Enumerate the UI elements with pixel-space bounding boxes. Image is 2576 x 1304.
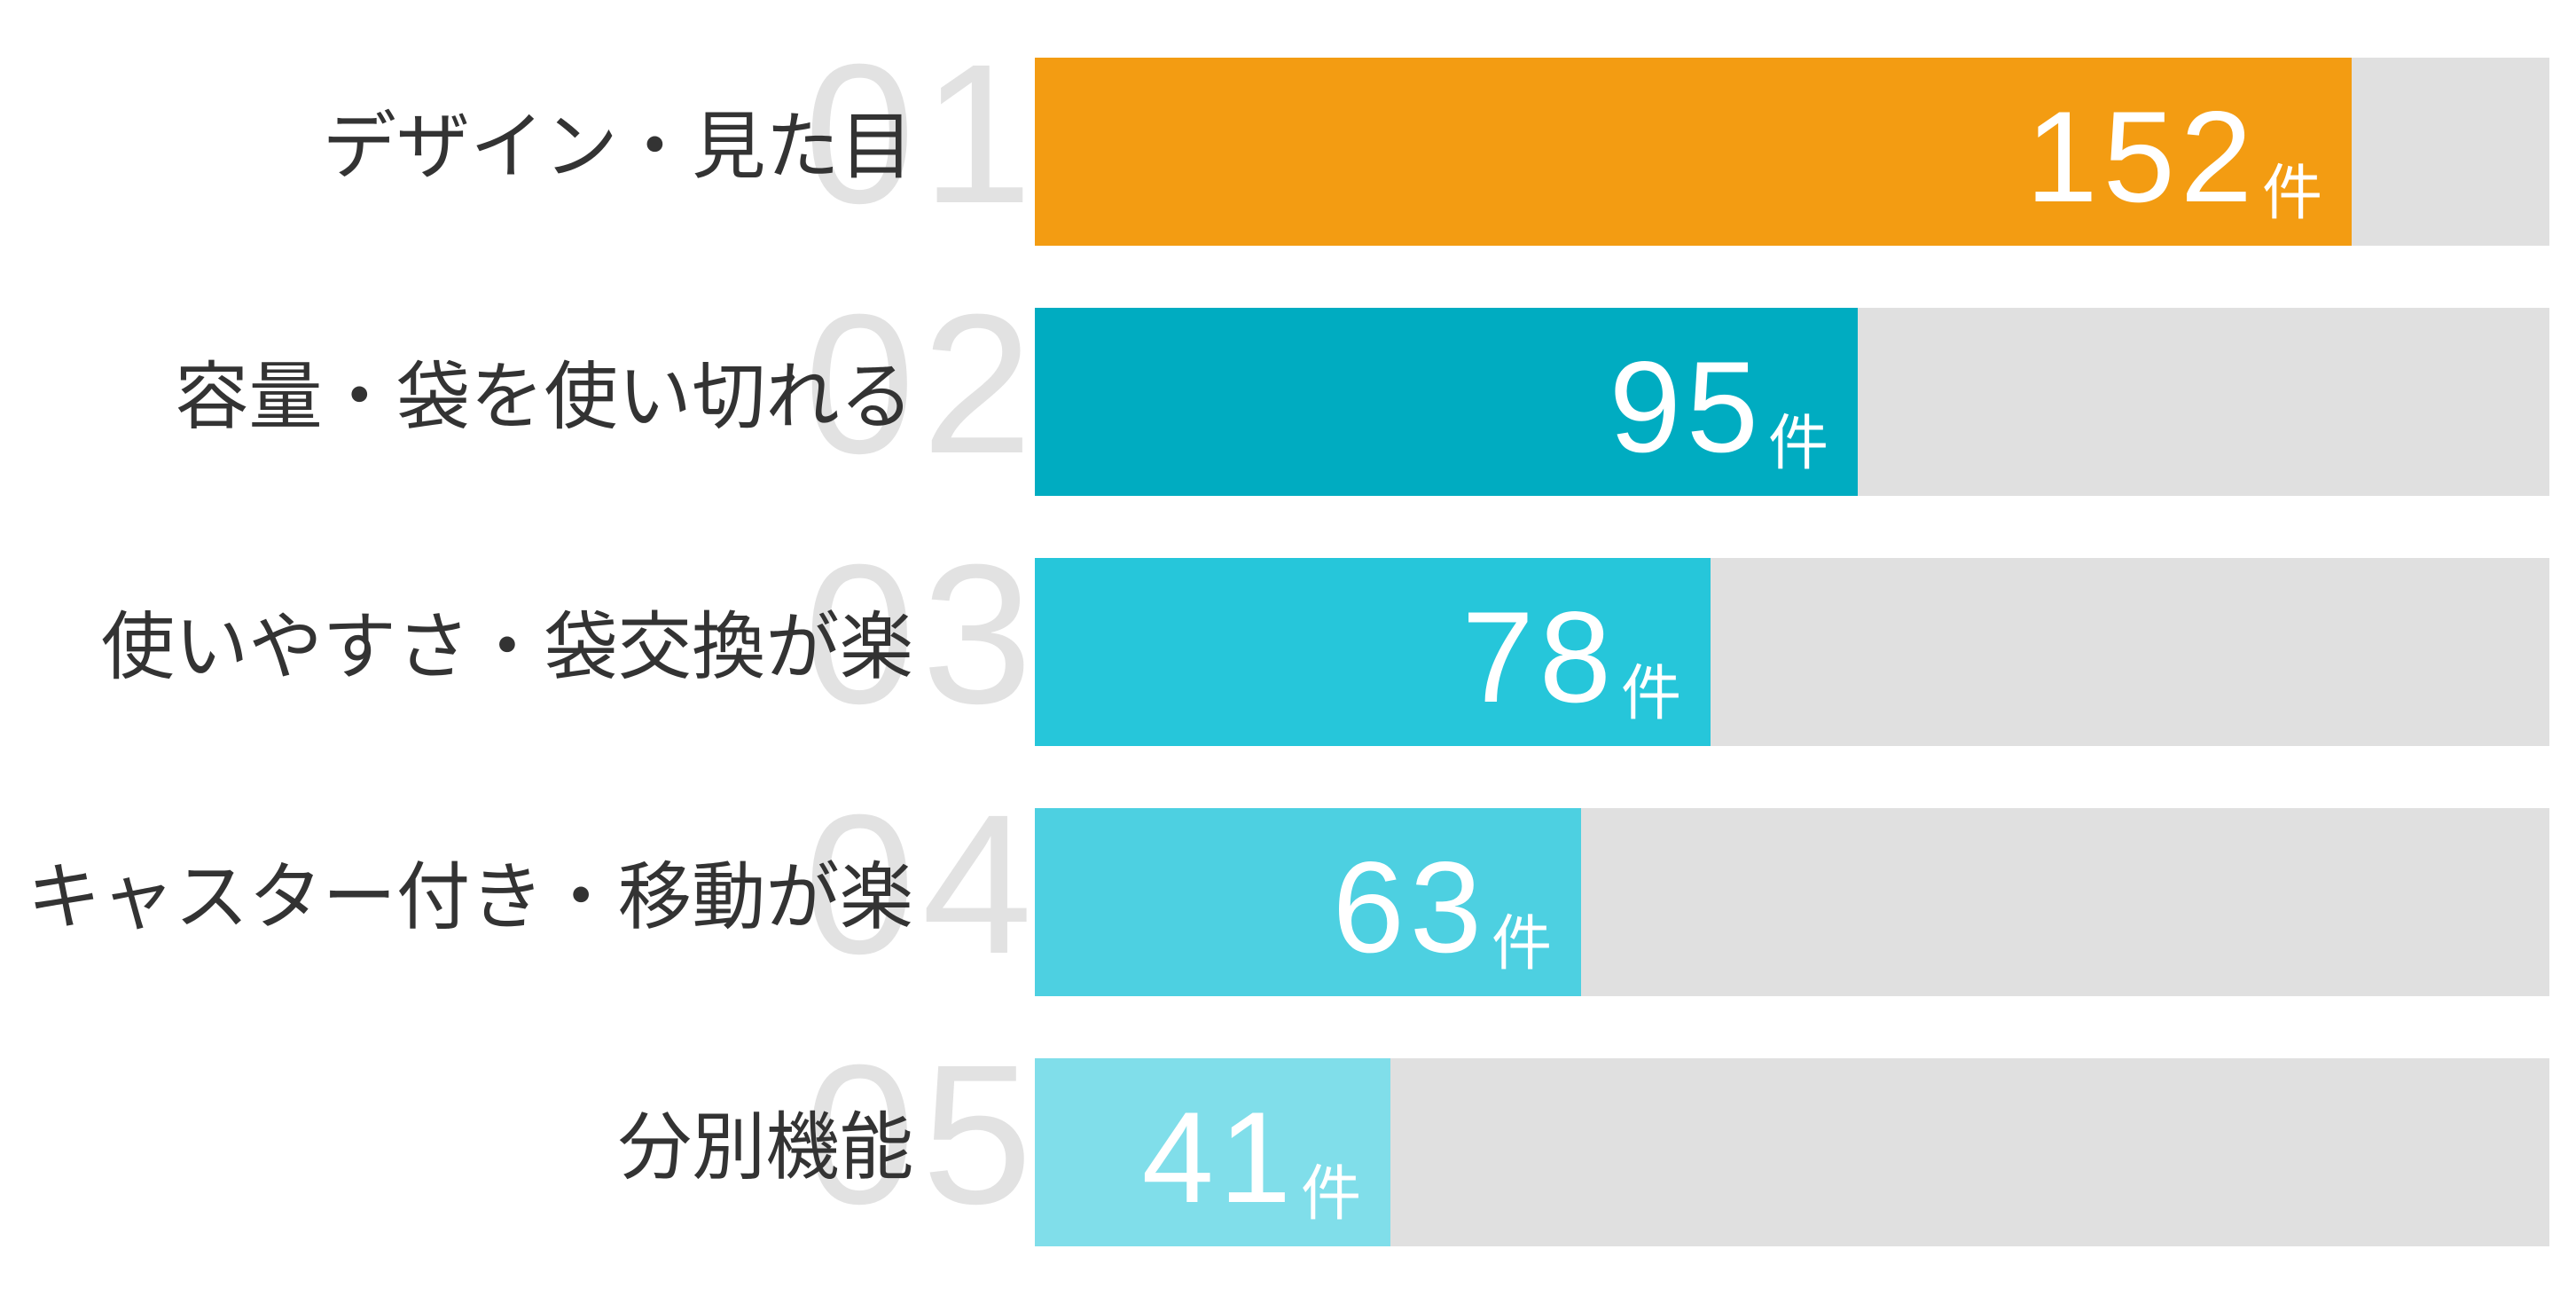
value 78: 78 [1462,585,1617,729]
value bar 95 [1035,308,1858,496]
rank number 03: 03 [804,523,1039,745]
rank number 04: 04 [804,774,1039,995]
value bar 78 [1035,558,1711,746]
label: capacity: 容量・袋を使い切れる [175,356,913,438]
rank number 05: 05 [804,1024,1039,1245]
value 63: 63 [1333,835,1487,979]
track bar 5 [1035,1058,2549,1246]
label: casters: キャスター付き・移動が楽 [27,856,913,939]
row 2: capacity [175,273,2549,496]
value 95: 95 [1609,334,1764,479]
value bar 152 [1035,58,2352,246]
row 4: casters [27,774,2549,996]
row 5: sorting [618,1024,2549,1246]
value bar 63 [1035,808,1581,996]
unit: 件 [1492,910,1552,978]
label: sorting: 分別機能 [618,1106,913,1189]
row 3: ease of use [101,523,2549,746]
value 152: 152 [2025,84,2258,229]
unit: 件 [2262,160,2322,227]
rank number 02: 02 [804,273,1039,495]
rank number 01: 01 [804,23,1039,245]
label: ease of use: 使いやすさ・袋交換が楽 [101,606,913,688]
value 41: 41 [1142,1085,1296,1229]
track bar 4 [1035,808,2549,996]
value bar 41 [1035,1058,1390,1246]
unit: 件 [1621,660,1681,727]
track bar 3 [1035,558,2549,746]
label: design and appearance: デザイン・見た目 [323,106,913,188]
track bar 1 [1035,58,2549,246]
unit: 件 [1301,1160,1361,1228]
track bar 2 [1035,308,2549,496]
unit: 件 [1768,410,1828,477]
row 1: design and appearance [323,23,2549,246]
